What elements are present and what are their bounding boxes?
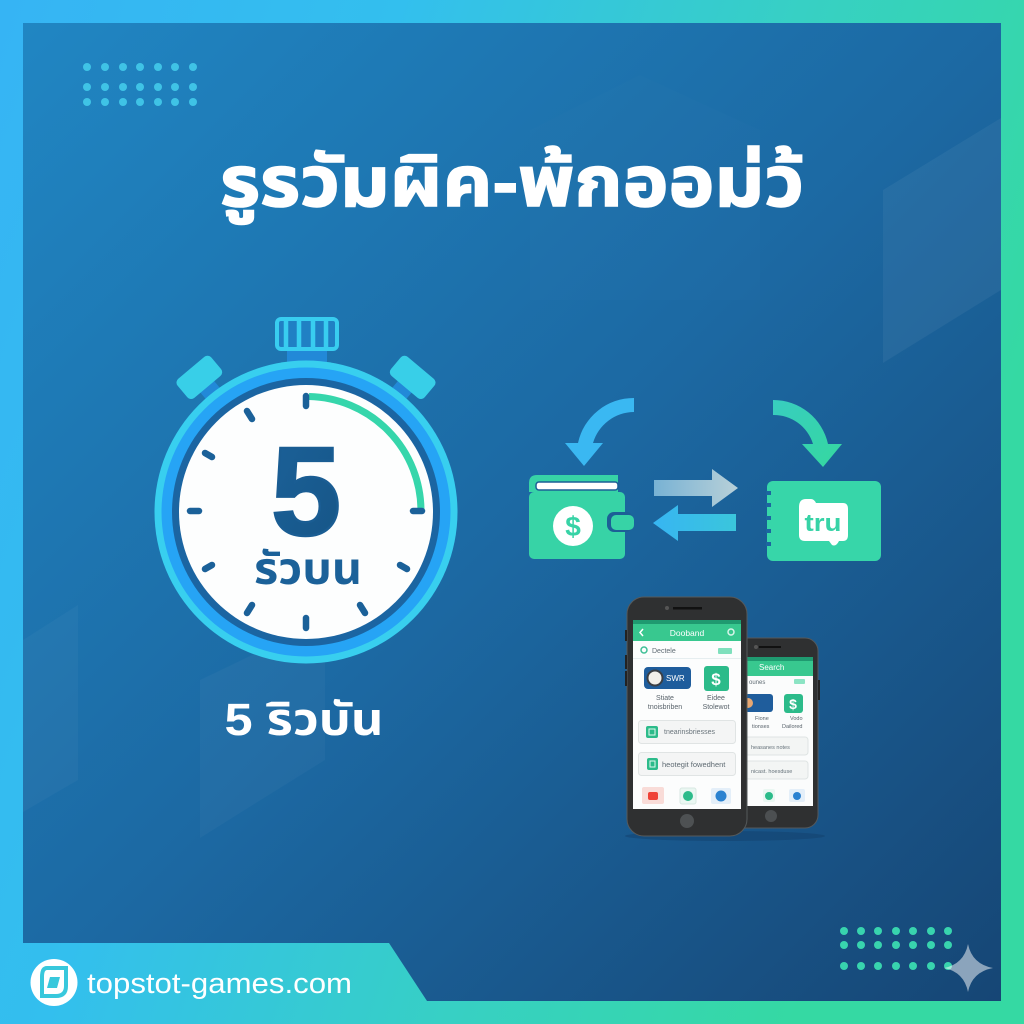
dial unit label: รัวบน: [254, 545, 362, 594]
wallet clasp: [607, 512, 634, 532]
front phone tile: swr: Stiate: [656, 695, 674, 702]
dollar coin: $: [565, 511, 581, 542]
front phone bottom icons: [642, 787, 731, 804]
footer banner: [23, 943, 427, 1001]
front phone tile: dollar: [703, 666, 729, 711]
front phone screen: [633, 620, 741, 809]
stopwatch caption: 5 ริวบัน: [224, 694, 384, 745]
arrow: blue pointing left: [653, 505, 736, 541]
front phone tile: dollar: Eidee: [707, 695, 725, 702]
icon: wallet: [529, 475, 634, 559]
phone: rear: ounes: [749, 680, 765, 686]
icon: stopwatch: [154, 319, 458, 664]
title: รูรวัมผิค-พ้กออม่ว้: [220, 143, 804, 224]
rear phone bottom icons: [763, 789, 805, 802]
front phone tile: swr: SWR: [666, 674, 685, 683]
front phone status row: Dectele: [652, 648, 676, 655]
phone shadow: [625, 831, 825, 841]
arrow: curved blue into wallet: [565, 398, 634, 466]
dot pattern: top left: [83, 63, 197, 106]
progress arc: [309, 396, 421, 511]
rear phone tiles: Vodo: [790, 716, 803, 722]
icon: tru card: [766, 481, 881, 561]
front phone row one: [638, 720, 736, 744]
front phone row one: tnearinsbriesses: [664, 729, 715, 736]
rear phone rows: [745, 737, 808, 779]
front phone status row: [633, 647, 741, 659]
rear phone tiles: $: [789, 696, 797, 712]
stopwatch right button: [376, 354, 438, 416]
big number 5: 5: [271, 421, 341, 562]
dot pattern: bottom right: [840, 927, 952, 970]
stopwatch rings and dial: [154, 360, 458, 664]
footer logo: [30, 959, 78, 1006]
stopwatch left button: [174, 354, 236, 416]
icon: four-point star: [944, 944, 993, 992]
rear phone tiles: Dailored: [782, 724, 802, 730]
rear phone tiles: Fione: [755, 716, 769, 722]
stopwatch crown: [277, 319, 337, 368]
footer website: topstot-games.com: [87, 968, 352, 1000]
rear phone rows: heasanes notes: [751, 745, 790, 751]
front phone row two: heotegit fowedhent: [662, 760, 726, 769]
arrow: grey pointing right: [654, 469, 738, 507]
tru logo bubble: tru: [804, 510, 842, 537]
arrow: curved green into tru card: [773, 400, 842, 467]
front phone row two: [638, 752, 736, 776]
front phone tile: swr: tnoisbriben: [648, 704, 682, 711]
background facets: [23, 75, 1001, 838]
front phone tile: dollar: $: [711, 670, 721, 689]
front phone tile: dollar: Stolewot: [703, 704, 729, 711]
front phone header label: Dooband: [670, 628, 705, 638]
rear phone header label: Search: [759, 663, 784, 672]
phone: front: [625, 597, 747, 836]
rear phone rows: nicast. hoesduse: [751, 769, 792, 775]
front phone tile: swr: [644, 667, 691, 711]
phone: rear: [730, 638, 820, 828]
rear phone tiles: tionses: [752, 724, 770, 730]
dial ticks: [190, 396, 422, 628]
rear phone tiles: [743, 694, 803, 730]
